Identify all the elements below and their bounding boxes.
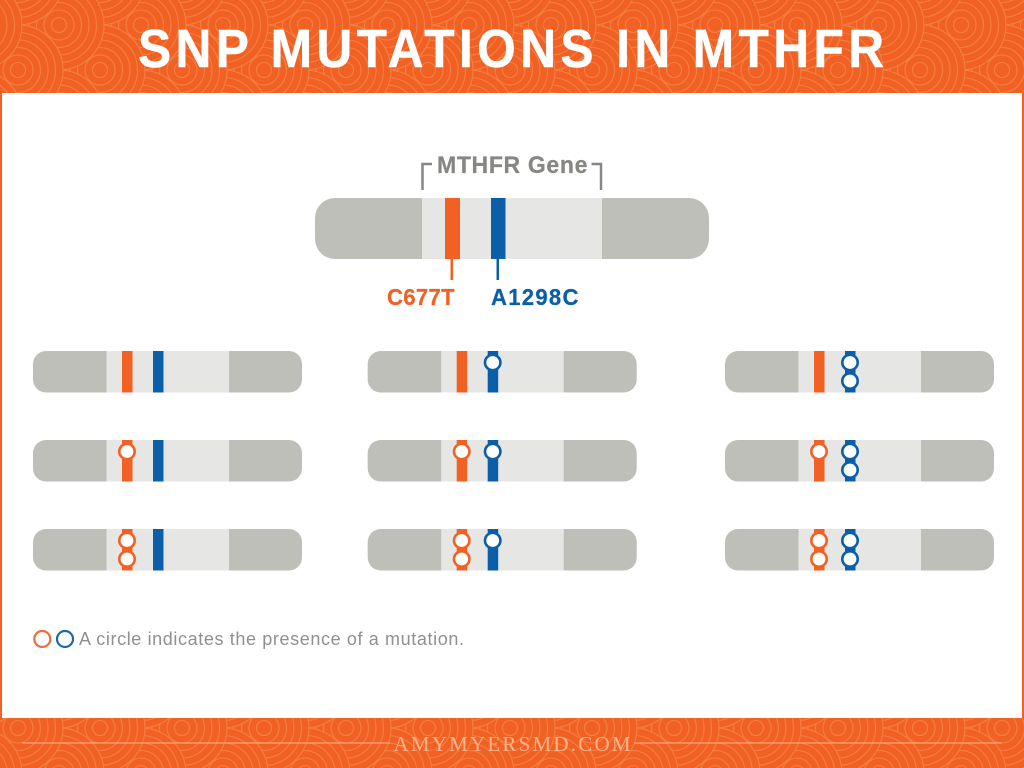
chromosome: column 2 row 2 [368,440,637,482]
footer rule right [634,742,1002,744]
legend [34,629,464,649]
chromosome: column 1 row 2 [33,440,302,482]
blue pointer line [496,259,499,280]
chromosome: column 2 row 1 [368,351,637,392]
orange pointer line [450,259,453,280]
large chromosome [315,198,709,259]
main gene diagram [315,151,709,310]
header band with ring pattern [0,0,1024,93]
chromosome: column 3 row 2 [725,440,994,482]
legend text: A circle indicates the presence of a mutation. [79,629,464,649]
chromosome: column 1 row 1 [33,351,302,392]
label: C677T: C677T [387,283,455,310]
gene label: MTHFR Gene [437,151,587,179]
footer rule left [22,742,390,744]
chromosome: column 3 row 3 [725,529,994,570]
right bracket [592,164,601,190]
left bracket [422,164,432,190]
footer website text: AMYMYERSMD.COM [394,732,631,756]
footer band with ring pattern [0,718,1024,768]
label: A1298C: A1298C [491,283,578,310]
icon: blue circle [57,631,73,647]
chromosome: column 1 row 3 [33,529,302,570]
title: SNP MUTATIONS IN MTHFR [138,18,884,78]
chromosome: column 3 row 1 [725,351,994,392]
chromosome: column 2 row 3 [368,529,637,570]
icon: orange circle [34,631,50,647]
